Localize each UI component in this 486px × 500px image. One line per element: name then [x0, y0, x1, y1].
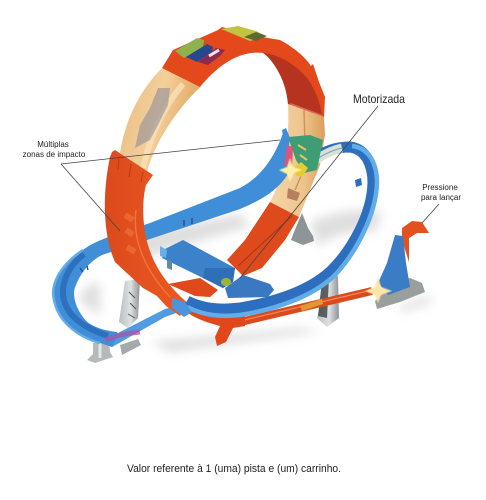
loop: left red section	[105, 150, 189, 316]
impact spark	[279, 158, 302, 182]
footer note: Valor referente à 1 (uma) pista e (um) carrinho.	[127, 463, 341, 475]
pillar: left tall	[119, 279, 141, 355]
label: Pressione para lançar: para lançar	[421, 193, 461, 202]
launcher tower	[378, 235, 410, 295]
callout line: Múltiplas upper	[61, 140, 280, 164]
car: magenta	[198, 48, 225, 65]
track marks	[80, 218, 192, 272]
launcher lever	[402, 221, 429, 262]
striped link between motor unit and track	[312, 148, 342, 163]
pillar: center	[317, 276, 339, 327]
callout line: Motorizada	[240, 106, 378, 278]
lower-left blue return to junction	[112, 302, 190, 347]
support pillars	[87, 213, 339, 363]
junction clip	[172, 298, 192, 317]
callout line: Pressione	[422, 204, 439, 223]
loop: bottom red curve	[183, 303, 245, 346]
label: Múltiplas zonas de impacto: zonas de impacto	[23, 150, 86, 159]
label: Motorizada: Motorizada	[353, 92, 405, 106]
pillar: right rear	[291, 213, 314, 245]
yellow car	[295, 162, 308, 177]
cast shadows	[78, 210, 430, 352]
loop: orange top arc	[162, 27, 325, 117]
motor unit	[279, 128, 323, 201]
launcher base	[375, 278, 425, 309]
track: upper blue ramp and left curve	[53, 133, 290, 347]
callout line: Múltiplas lower	[61, 164, 120, 231]
loop: right red descending section	[227, 202, 299, 276]
blue motor base platform	[160, 240, 274, 298]
cars on top of loop	[175, 26, 267, 65]
label: Múltiplas zonas de impacto: Múltiplas	[37, 140, 69, 149]
launcher	[365, 221, 429, 309]
cars: yellow-green pair at crest	[221, 26, 266, 41]
launch track: red straight section	[236, 291, 372, 323]
green motor housing	[288, 135, 323, 173]
silhouette drawn on tan panel	[135, 88, 170, 148]
car: green	[175, 38, 204, 58]
launcher spark	[365, 276, 392, 303]
red feeder under platform	[168, 278, 218, 297]
car: blue	[186, 44, 213, 62]
lime wheel on platform	[221, 278, 231, 286]
label: Pressione para lançar: Pressione	[422, 183, 458, 192]
track: big right blue curve	[187, 147, 373, 309]
blue clip on right curve	[355, 178, 362, 187]
small orange car on launch track	[300, 299, 323, 311]
loop: dark inner wall	[264, 53, 322, 115]
loop: right tan section	[270, 104, 325, 217]
small brown car decal	[287, 188, 300, 201]
red and white printed strip	[284, 145, 293, 168]
loop: left tan translucent section	[120, 68, 200, 172]
blue tab	[280, 128, 290, 153]
pillar: left front	[87, 341, 113, 363]
callout lines	[61, 106, 439, 278]
